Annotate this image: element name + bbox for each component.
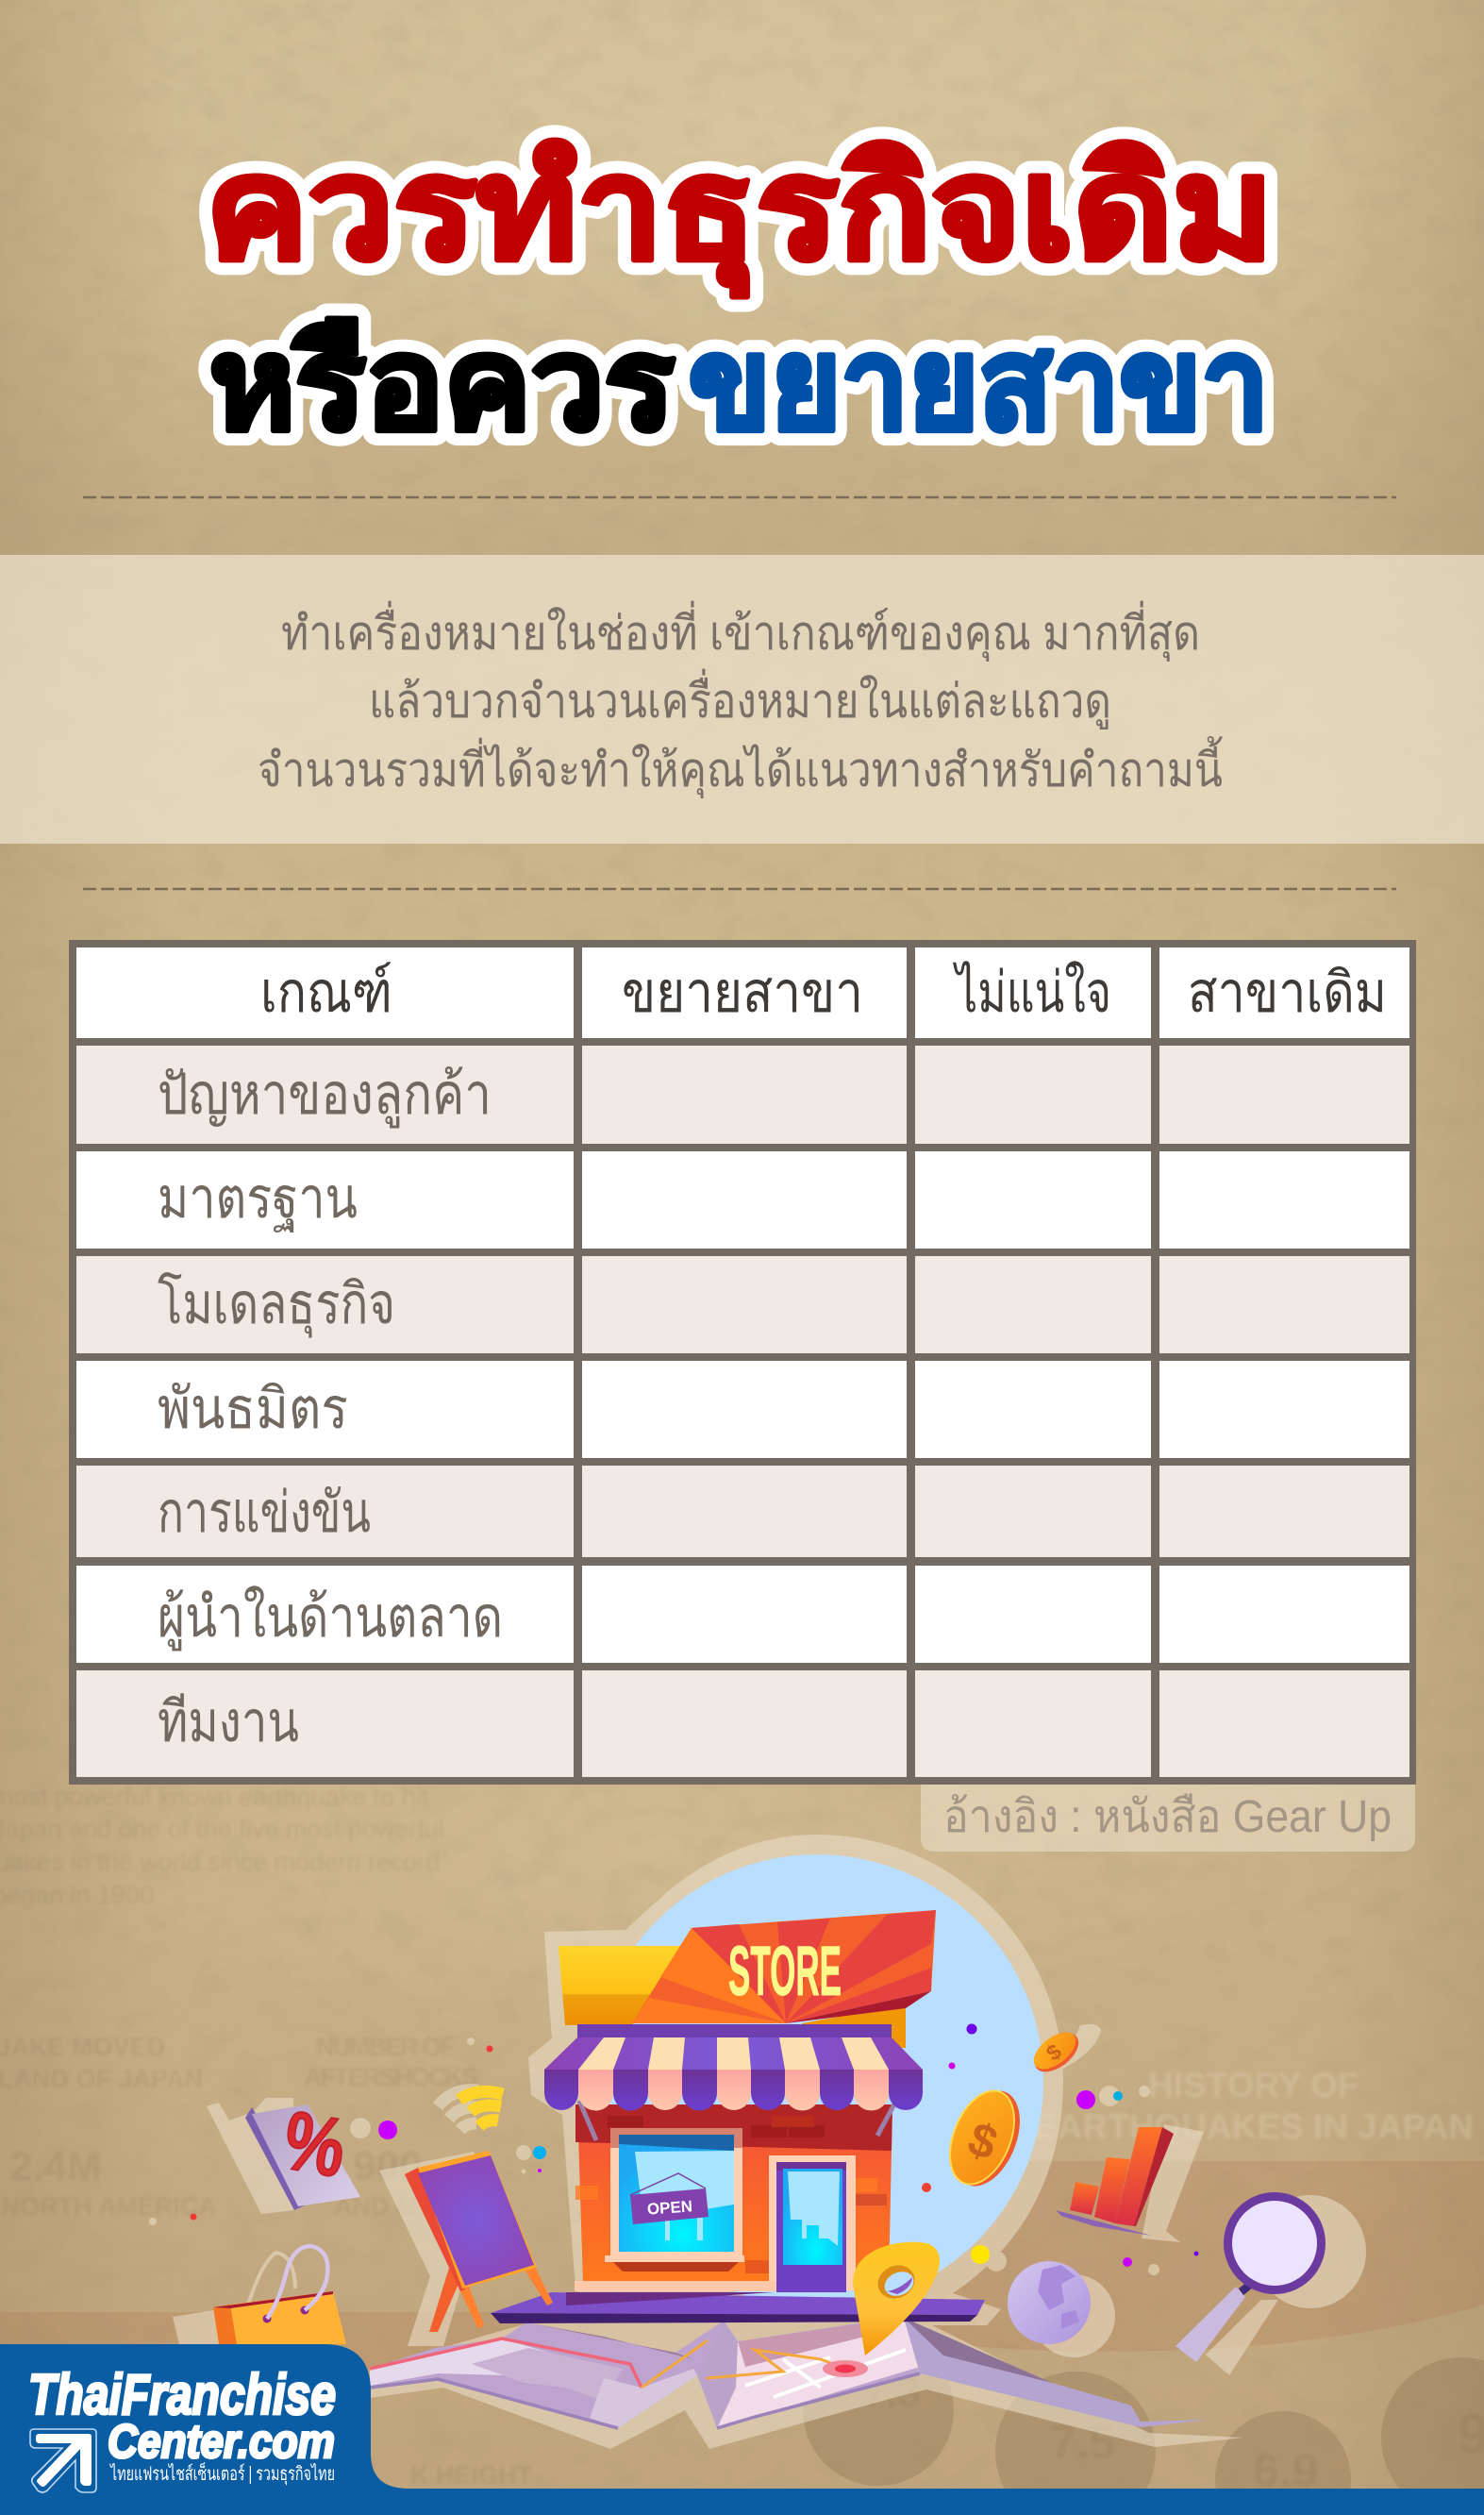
title white outline: ควรทำธุรกิจเดิม xyxy=(206,129,1274,297)
faded background text: NUMBER OF xyxy=(316,2033,456,2061)
faded background text: AFTERSHOCKS xyxy=(304,2063,478,2091)
table row labels: ปัญหาของลูกค้า xyxy=(158,1063,492,1129)
faded background text: K HEIGHT xyxy=(410,2461,533,2490)
instruction text: ทำเครื่องหมายในช่องที่ เข้าเกณฑ์ของคุณ มากที่สุด xyxy=(281,601,1200,662)
instruction text: แล้วบวกจำนวนเครื่องหมายในแต่ละแถวดู xyxy=(369,669,1111,729)
sky circle xyxy=(591,1854,1043,2307)
table row labels: ผู้นำในด้านตลาด xyxy=(158,1585,503,1652)
table header: สาขาเดิม xyxy=(1188,961,1387,1024)
table row labels: โมเดลธุรกิจ xyxy=(158,1271,395,1338)
faded background text: 2.4M xyxy=(9,2143,102,2189)
faded heading: EARTHQUAKES IN JAPAN xyxy=(1034,2107,1474,2146)
wall xyxy=(577,2104,892,2284)
map xyxy=(370,2318,1209,2428)
title line 2 black: หรือควร xyxy=(209,312,675,456)
logo text: Center.com xyxy=(108,2415,335,2468)
logo tagline: ไทยแฟรนไชส์เซ็นเตอร์ | รวมธุรกิจไทย xyxy=(109,2461,335,2486)
percent tag icon xyxy=(245,2092,360,2210)
support struts xyxy=(579,2101,896,2140)
title white outline: ขยายสาขา xyxy=(689,312,1269,456)
halo shapes xyxy=(149,1835,1366,2449)
ghost bag handle xyxy=(247,2253,295,2307)
faded background text: most powerful known earthquake to hit xyxy=(0,1783,429,1811)
instruction text: จำนวนรวมที่ได้จะทำให้คุณได้แนวทางสำหรับคำถามนี้ xyxy=(258,736,1223,798)
sandwich board xyxy=(405,2151,553,2332)
ghost wifi xyxy=(438,2090,478,2130)
coins xyxy=(938,2025,1086,2196)
magnifier icon xyxy=(1176,2192,1326,2362)
faded background text: 7.3 xyxy=(863,2370,921,2416)
store sign xyxy=(632,1910,936,2023)
citation tag: อ้างอิง : หนังสือ Gear Up xyxy=(943,1792,1392,1842)
title white outline: หรือควร xyxy=(209,312,675,456)
platform xyxy=(491,2292,985,2315)
title line 2 blue: ขยายสาขา xyxy=(689,312,1269,456)
coins: $ xyxy=(1042,2038,1066,2066)
logo text xyxy=(28,2363,336,2468)
floor strip xyxy=(575,2281,776,2291)
faded heading xyxy=(1034,2066,1474,2146)
title line 1: ควรทำธุรกิจเดิม xyxy=(206,129,1274,297)
panel: instructions xyxy=(0,555,1484,844)
table row labels xyxy=(158,1063,503,1753)
faded background text xyxy=(0,1783,1484,2497)
table header xyxy=(260,960,1387,1024)
table row labels: การแข่งขัน xyxy=(158,1481,371,1544)
open sign: OPEN xyxy=(646,2197,693,2219)
store building xyxy=(491,1910,985,2323)
title xyxy=(206,129,1274,456)
coins: $ xyxy=(961,2112,1005,2171)
table header: เกณฑ์ xyxy=(260,961,392,1024)
window xyxy=(605,2128,744,2272)
percent sign: % xyxy=(277,2092,353,2195)
store sign: STORE xyxy=(728,1932,842,2010)
decorative dots xyxy=(191,2023,1198,2267)
footer logo bar xyxy=(0,2344,1484,2515)
table header: ขยายสาขา xyxy=(622,961,863,1024)
open sign xyxy=(630,2173,709,2224)
shopping bag xyxy=(213,2246,346,2344)
illustration: store scene xyxy=(149,1835,1366,2449)
globe icon xyxy=(1008,2261,1091,2344)
faded background text: Japan and one of the five most powerful xyxy=(0,1815,444,1843)
title white outline xyxy=(206,129,1274,456)
bar chart icon xyxy=(1056,2127,1174,2236)
table row labels: พันธมิตร xyxy=(158,1377,348,1440)
table row labels: ทีมงาน xyxy=(158,1690,299,1753)
faded background text: AND MORE xyxy=(334,2192,473,2221)
table row labels: มาตรฐาน xyxy=(158,1166,358,1232)
door xyxy=(769,2155,856,2292)
faded heading: HISTORY OF xyxy=(1148,2066,1359,2104)
instruction text xyxy=(258,601,1223,798)
faded background text: 6.9 xyxy=(1253,2444,1319,2497)
table xyxy=(69,940,1416,1785)
wifi icon xyxy=(459,2092,503,2126)
logo arrow icon xyxy=(30,2429,96,2492)
faded background text: 900 xyxy=(353,2143,422,2189)
location pin xyxy=(853,2242,940,2356)
awning xyxy=(544,2024,923,2110)
logo text: ThaiFranchise xyxy=(28,2363,336,2426)
faded background text: 7.5 xyxy=(1050,2416,1116,2469)
table header: ไม่แน่ใจ xyxy=(953,960,1111,1024)
